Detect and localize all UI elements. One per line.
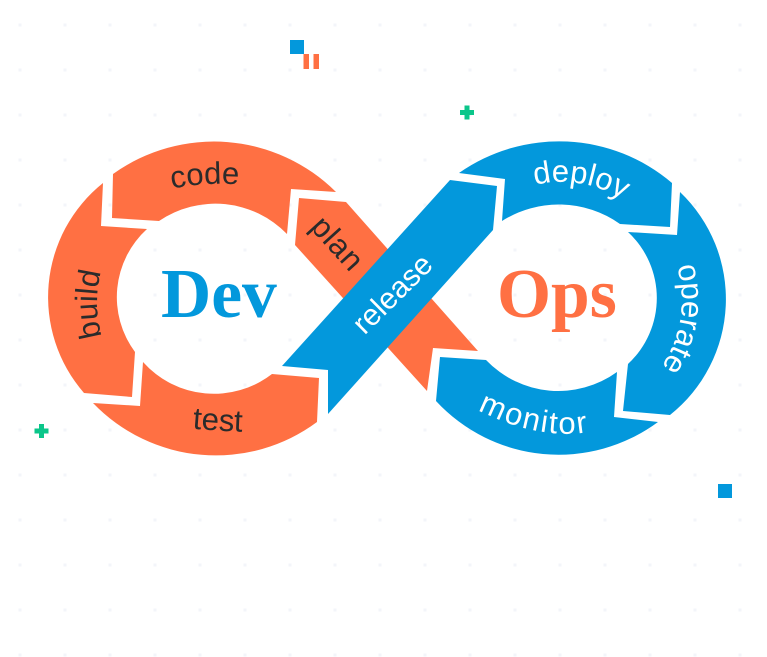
segment: plan: plan <box>306 218 360 272</box>
segment: operate <box>623 192 726 415</box>
icon: blue square bottom right <box>718 484 732 498</box>
segment: monitor <box>436 357 658 455</box>
segment: build: build <box>74 270 102 340</box>
icon: green plus left <box>34 424 48 438</box>
segment: monitor: monitor <box>480 396 586 434</box>
segment: release: release <box>354 258 432 334</box>
icon: green plus top <box>460 106 474 120</box>
icon: blue square top <box>290 40 304 54</box>
segment: deploy <box>459 141 672 227</box>
segment: plan <box>295 198 478 391</box>
segment: code <box>112 142 336 234</box>
segment: test <box>93 362 319 456</box>
heading: Dev: Dev <box>161 256 277 333</box>
segment: operate: operate <box>664 265 698 372</box>
segment: build <box>48 183 147 397</box>
heading: Ops: Ops <box>497 256 617 333</box>
segment: release <box>282 180 497 414</box>
segment: test: test <box>194 409 242 432</box>
segment: deploy: deploy <box>534 160 630 200</box>
icon: orange bars <box>304 54 319 69</box>
segment: code: code <box>172 161 238 188</box>
